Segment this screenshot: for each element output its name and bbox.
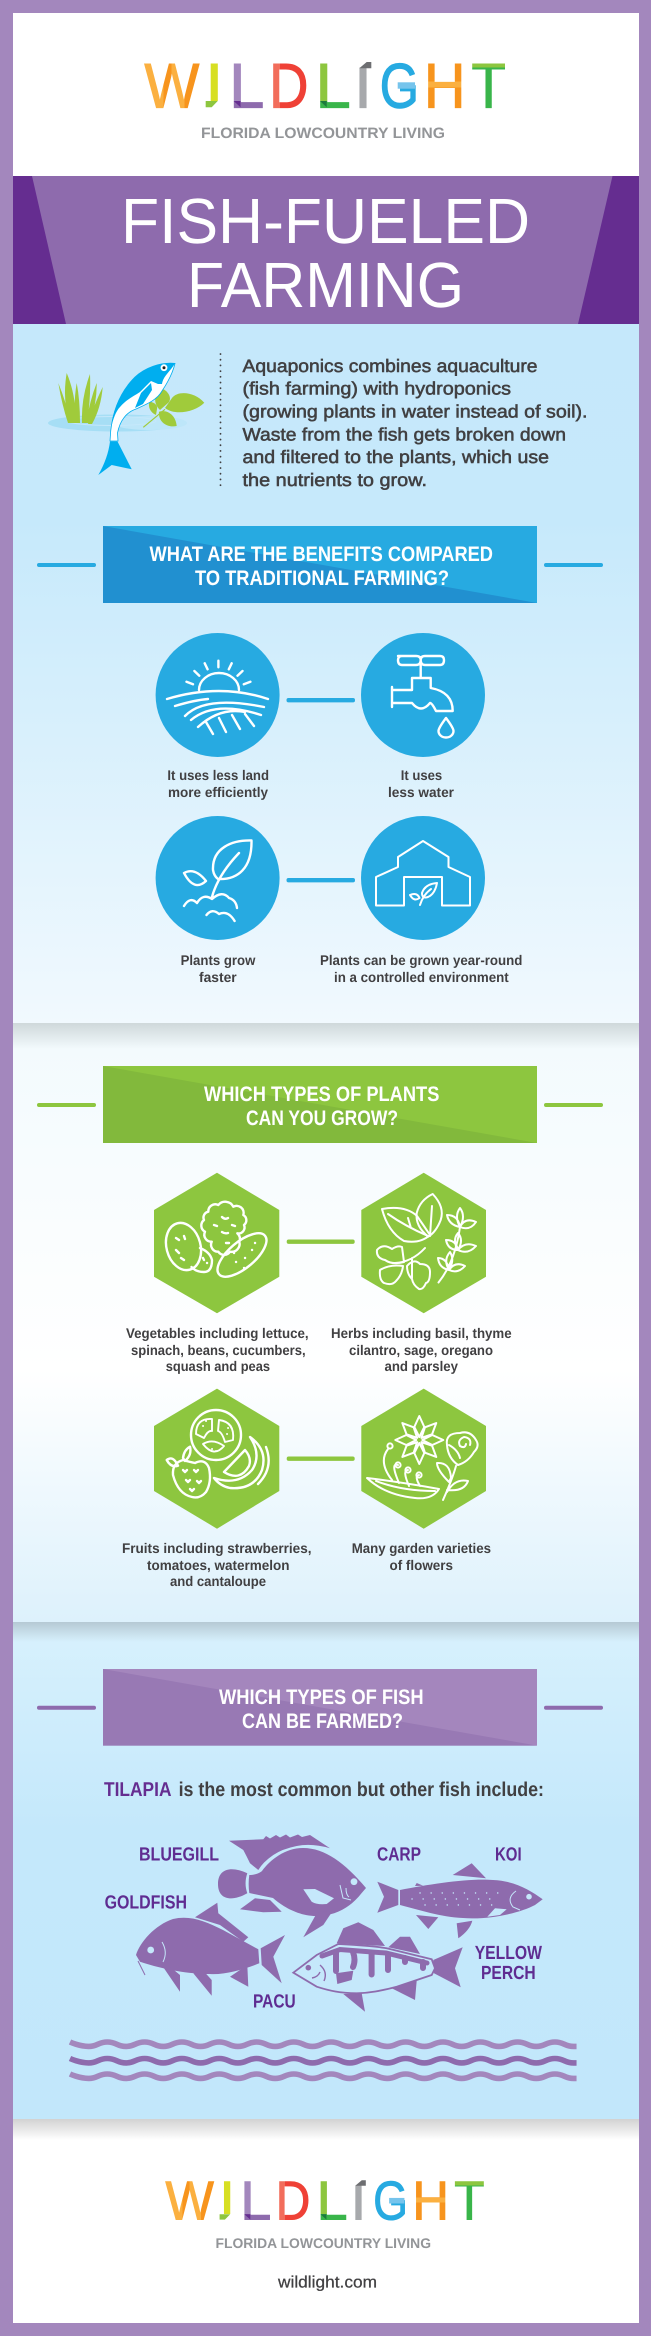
label: more efficiently [168, 784, 268, 800]
label: Plants grow [181, 952, 255, 968]
intro text: the nutrients to grow. [242, 470, 427, 490]
heading: fish: WHICH TYPES OF FISH [219, 1686, 424, 1709]
benefit: water [361, 633, 485, 800]
waves [70, 2042, 577, 2078]
fish labels: GOLDFISH [105, 1893, 187, 1914]
benefit: land [156, 633, 280, 800]
panel: benefits [13, 324, 639, 1023]
connector [287, 1240, 355, 1244]
logo: Wildlight: H [424, 51, 465, 121]
logo: Wildlight: W [144, 51, 200, 121]
logo: Wildlight: G [380, 51, 419, 121]
label: in a controlled environment [334, 969, 509, 985]
label: less water [388, 784, 455, 800]
connector [287, 1456, 355, 1461]
label: fruits: and cantaloupe [170, 1573, 266, 1589]
heading: plants: CAN YOU GROW? [246, 1107, 398, 1130]
footer logo: Wildlight [166, 2171, 485, 2232]
footer logo: Wildlight: T [454, 2171, 485, 2232]
label: herbs: and parsley [384, 1358, 458, 1374]
logo: Wildlight: T [472, 51, 506, 121]
footer logo: Wildlight: I [219, 2171, 235, 2232]
panel: fish [13, 1622, 639, 2119]
logo: Wildlight [144, 51, 506, 121]
fish illustration: tilapia [218, 1834, 366, 1937]
intro sentence: TILAPIA [104, 1779, 172, 1801]
title: FARMING [187, 249, 464, 321]
intro text: Aquaponics combines aquaculture [242, 356, 538, 376]
icon: herbs [377, 1194, 476, 1289]
plant type: herbs [361, 1173, 486, 1313]
logo: Wildlight: L [229, 51, 264, 121]
intro text: Waste from the fish gets broken down [242, 424, 566, 444]
label: vegetables: spinach, beans, cucumbers, [131, 1342, 306, 1358]
icon: sun over fields [167, 661, 268, 734]
label: flowers: Many garden varieties [352, 1540, 491, 1556]
logo: Wildlight: I [206, 51, 223, 121]
icon: tap [392, 656, 454, 738]
fish labels [105, 1845, 542, 2013]
title: FISH-FUELED [121, 185, 530, 257]
fish illustration: goldfish [136, 1903, 285, 1996]
intro text: (growing plants in water instead of soil). [242, 402, 588, 422]
label: faster [199, 969, 237, 985]
heading: benefits: WHAT ARE THE BENEFITS COMPARED [150, 543, 493, 566]
icon: sprout [184, 840, 252, 921]
icon: greenhouse barn [376, 841, 470, 906]
footer logo: Wildlight: W [166, 2171, 214, 2232]
logo: Wildlight: I [354, 51, 372, 121]
footer logo: Wildlight: D [276, 2171, 310, 2232]
tagline: FLORIDA LOWCOUNTRY LIVING [201, 125, 445, 142]
dotted divider [220, 354, 222, 490]
heading: benefits: TO TRADITIONAL FARMING? [195, 567, 449, 590]
fish labels: PERCH [481, 1963, 536, 1984]
label: vegetables: squash and peas [166, 1358, 270, 1374]
heading: plants: WHICH TYPES OF PLANTS [204, 1083, 439, 1106]
logo: Wildlight: L [316, 51, 351, 121]
heading: fish: CAN BE FARMED? [242, 1710, 403, 1733]
footer panel [13, 2119, 639, 2323]
connector [286, 698, 355, 702]
icon: flowers [367, 1416, 478, 1500]
fish labels: YELLOW [475, 1943, 542, 1964]
label: herbs: Herbs including basil, thyme [331, 1325, 512, 1341]
label: Plants can be grown year-round [320, 952, 522, 968]
footer logo: Wildlight: L [317, 2171, 348, 2232]
intro sentence: is the most common but other fish include: [179, 1779, 544, 1801]
label: fruits: Fruits including strawberries, [122, 1540, 312, 1556]
heading: plants [37, 1066, 603, 1143]
benefit: controlled environment [320, 816, 522, 985]
connector [286, 878, 355, 882]
footer logo: Wildlight: L [240, 2171, 271, 2232]
footer logo: Wildlight: G [373, 2171, 408, 2232]
header panel [13, 13, 639, 176]
label: It uses less land [167, 767, 269, 783]
footer logo: Wildlight: H [412, 2171, 449, 2232]
plant type: flowers [361, 1389, 486, 1529]
logo: Wildlight: D [269, 51, 308, 121]
footer logo: Wildlight: I [351, 2171, 366, 2232]
label: herbs: cilantro, sage, oregano [349, 1342, 493, 1358]
label: fruits: tomatoes, watermelon [147, 1557, 290, 1573]
label: It uses [401, 767, 442, 783]
icon: leaping fish with plants [48, 363, 204, 475]
intro text: and filtered to the plants, which use [242, 447, 549, 467]
fish illustration: perch [293, 1922, 463, 2012]
panel: plants [13, 1023, 639, 1622]
label: vegetables: Vegetables including lettuce, [126, 1325, 309, 1341]
label: flowers: of flowers [390, 1557, 453, 1573]
icon: vegetables [161, 1202, 273, 1284]
fish labels: KOI [495, 1845, 522, 1866]
fish labels: BLUEGILL [139, 1845, 219, 1866]
fish illustration: carp [377, 1863, 543, 1938]
plant type: vegetables [154, 1173, 279, 1313]
fish labels: PACU [253, 1992, 296, 2013]
heading: fish [37, 1669, 603, 1746]
icon: fruits [167, 1410, 269, 1497]
fish labels: CARP [377, 1845, 421, 1866]
title banner [13, 176, 639, 324]
website: wildlight.com [277, 2274, 377, 2292]
intro text: (fish farming) with hydroponics [242, 378, 511, 398]
plant type: fruits [154, 1389, 279, 1529]
benefit: growth [156, 816, 280, 985]
heading: benefits [37, 526, 603, 603]
footer tagline: FLORIDA LOWCOUNTRY LIVING [216, 2235, 431, 2251]
